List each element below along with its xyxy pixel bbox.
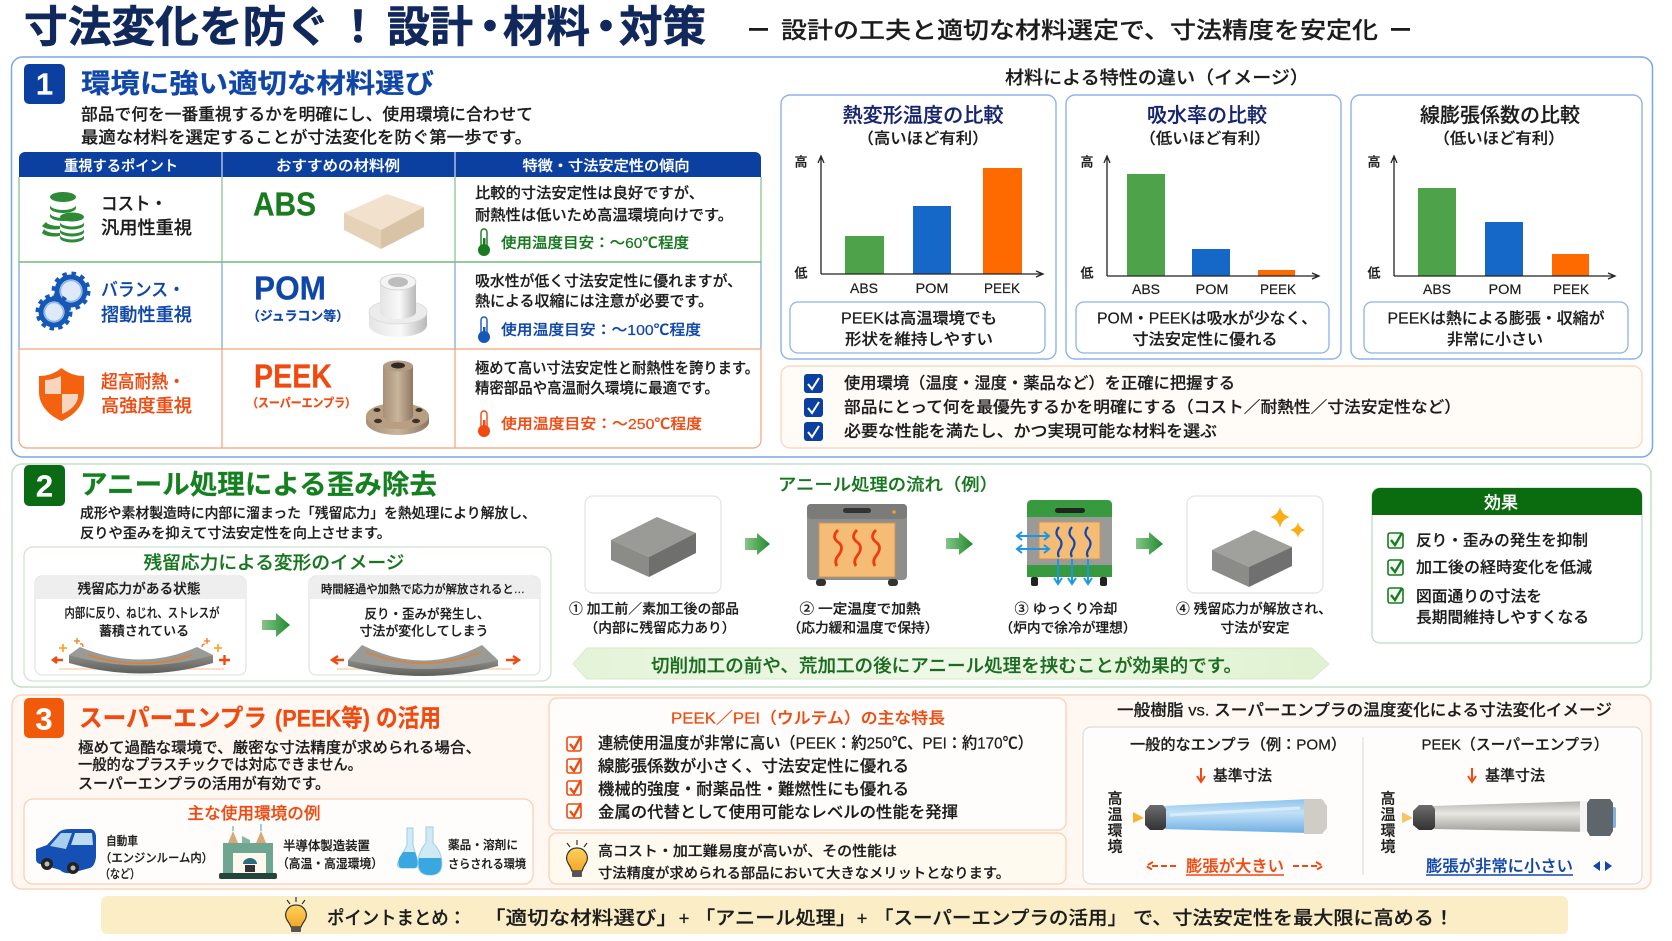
title — [24, 4, 706, 52]
icon: warped part — [332, 645, 519, 676]
heading 2: アニール処理による歪み除去 — [80, 470, 437, 500]
row label: heat resistance: 高強度重視 — [101, 396, 192, 416]
icon: gears — [38, 274, 88, 328]
expansion label: 膨張が非常に小さい — [1426, 856, 1573, 876]
bar chart: PEEK — [1553, 281, 1590, 297]
effects list: 長期間維持しやすくなる — [1416, 608, 1589, 626]
card: expansion comparison — [1083, 727, 1642, 884]
checklist text — [844, 374, 1461, 440]
table header labels: 重視するポイント — [64, 158, 178, 175]
heading 1: 環境に強い適切な材料選び — [81, 69, 434, 99]
badge 2 — [24, 465, 65, 506]
step 1 label: （内部に残留応力あり） — [584, 620, 736, 636]
checklist text: 部品にとって何を最優先するかを明確にする（コスト／耐熱性／寸法安定性など） — [844, 398, 1461, 416]
state: stress released: 寸法が変化してしまう — [360, 624, 488, 638]
material name PEEK: PEEK — [254, 358, 332, 394]
description ABS — [475, 184, 733, 224]
check icons — [567, 736, 581, 818]
row label: balance: バランス・ — [101, 280, 185, 300]
column: PEEK — [1380, 736, 1616, 876]
material name ABS: ABS — [253, 186, 316, 222]
chart card: water absorption — [1066, 95, 1341, 359]
column: PEEK: 温 — [1380, 806, 1396, 824]
chart title: 線膨張係数の比較 — [1420, 104, 1580, 127]
bar chart: 低 — [1367, 266, 1381, 280]
expansion label — [1146, 856, 1323, 876]
text: chemicals: 薬品・溶剤に — [448, 837, 518, 852]
bar chart: PEEK — [984, 280, 1021, 296]
intro text 2: 成形や素材製造時に内部に溜まった「残留応力」を熱処理により解放し、 — [80, 505, 536, 521]
card title: PEEK／PEI（ウルテム）の主な特長 — [671, 710, 945, 728]
column: general engineering plastic — [1107, 736, 1346, 876]
text: chemicals: さらされる環境 — [448, 857, 526, 871]
chart card: thermal expansion — [1351, 95, 1642, 359]
intro text 2: 反りや歪みを抑えて寸法安定性を向上させます。 — [80, 525, 391, 541]
arrow: step 2 to 3 — [946, 532, 973, 555]
effects list: 図面通りの寸法を — [1416, 588, 1542, 606]
chart caption — [790, 302, 1045, 353]
step 2 label: （応力緩和温度で保持） — [788, 620, 938, 636]
step 4 label — [1176, 600, 1332, 636]
checklist text: 必要な性能を満たし、かつ実現可能な材料を選ぶ — [844, 422, 1217, 440]
features list — [598, 734, 1033, 822]
heading 3: (PEEK等) — [275, 704, 370, 732]
state: stress released — [309, 576, 540, 676]
summary text: + — [857, 908, 867, 928]
effects list: 加工後の経時変化を低減 — [1416, 558, 1593, 576]
chart caption: 形状を維持しやすい — [845, 330, 993, 348]
text: semiconductor: （高温・高湿環境） — [277, 856, 383, 871]
title: 材料 — [503, 4, 590, 52]
chart caption: PEEKは熱による膨張・収縮が — [1388, 308, 1605, 328]
row: cost — [42, 184, 733, 256]
icon: light bulb — [567, 840, 587, 877]
summary text: ポイントまとめ： — [327, 908, 466, 928]
bar chart: ABS — [850, 280, 878, 296]
bar chart: 高 — [1080, 154, 1094, 170]
column: general engineering plastic: 温 — [1107, 806, 1123, 824]
chart section title: 材料による特性の違い（イメージ） — [1005, 68, 1309, 88]
column: PEEK: 基準寸法 — [1485, 768, 1545, 784]
bar chart — [794, 154, 1043, 296]
column: PEEK: 環 — [1380, 822, 1396, 840]
expansion label: 膨張が大きい — [1186, 856, 1284, 876]
state: residual stress present: 内部に反り、ねじれ、ストレスが — [64, 606, 220, 620]
state: stress released: 時間経過や加熱で応力が解放されると… — [321, 582, 525, 596]
title: 対策 — [619, 4, 706, 52]
icon: shield — [39, 368, 84, 421]
arrow: state transition — [262, 613, 290, 637]
heading 3: スーパーエンプラ — [79, 704, 267, 732]
expansion label — [1426, 856, 1612, 876]
column: PEEK: 高 — [1380, 790, 1396, 808]
row label: cost — [101, 194, 192, 238]
column: general engineering plastic: 境 — [1107, 838, 1123, 856]
chart caption: 寸法安定性に優れる — [1132, 330, 1278, 348]
summary bar — [101, 896, 1568, 934]
chart title: 熱変形温度の比較 — [842, 104, 1004, 127]
column: general engineering plastic: 高 — [1107, 790, 1123, 808]
step 4: stable part — [1176, 496, 1332, 636]
summary text: で、寸法安定性を最大限に高める！ — [1133, 908, 1454, 928]
intro text 1: 最適な材料を選定することが寸法変化を防ぐ第一歩です。 — [81, 127, 532, 147]
arrow: step 1 to 2 — [745, 533, 770, 555]
chart caption — [1076, 302, 1329, 353]
step 3 label — [1000, 600, 1136, 636]
text: semiconductor: 半導体製造装置 — [283, 838, 370, 853]
text: automotive: （エンジンルーム内） — [100, 850, 213, 865]
bar chart — [1367, 154, 1615, 297]
summary text: 「アニール処理」 — [695, 908, 856, 928]
step 2 label — [788, 602, 938, 636]
column: PEEK: PEEK（スーパーエンプラ） — [1422, 736, 1608, 754]
summary text: 「スーパーエンプラの活用」 — [874, 908, 1127, 928]
banner: timing advice: 切削加工の前や、荒加工の後にアニール処理を挟むことが効果的です。 — [651, 655, 1242, 676]
description ABS: 耐熱性は低いため高温環境向けです。 — [475, 207, 733, 224]
step 1 label — [569, 600, 739, 636]
PEEK note: （スーパーエンプラ） — [247, 396, 356, 410]
title: ！ — [336, 4, 380, 52]
card: use environments — [24, 799, 533, 884]
bar chart: PEEK — [1260, 281, 1297, 297]
card: cost tip — [549, 833, 1066, 884]
check icons — [1388, 533, 1403, 603]
chart caption — [1364, 302, 1628, 353]
tip text: 寸法精度が求められる部品において大きなメリットとなります。 — [598, 865, 1010, 881]
step 3 label: （炉内で徐冷が理想） — [1000, 620, 1136, 636]
step 4 label: ④ 残留応力が解放され、 — [1176, 600, 1332, 616]
badge 3: 3 — [35, 702, 53, 736]
icon: car — [36, 829, 96, 874]
bar chart: 高 — [794, 154, 808, 170]
row label: balance — [101, 280, 192, 325]
text: chemicals — [448, 837, 526, 871]
description POM: 吸水性が低く寸法安定性に優れますが、 — [475, 272, 742, 290]
comparison section title: 一般樹脂 vs. スーパーエンプラの温度変化による寸法変化イメージ — [1117, 702, 1612, 720]
column: general engineering plastic: 基準寸法 — [1213, 768, 1272, 784]
row label: cost: コスト・ — [101, 194, 167, 214]
chart subtitle: （低いほど有利） — [1434, 130, 1564, 148]
step 2 label: ② 一定温度で加熱 — [800, 602, 921, 616]
intro text 2 — [80, 505, 536, 541]
state: residual stress present: 蓄積されている — [99, 624, 189, 638]
table header labels — [64, 158, 690, 175]
icon: PEEK flange part — [366, 360, 429, 435]
features list: 線膨張係数が小さく、寸法安定性に優れる — [598, 756, 909, 776]
state: residual stress present: 残留応力がある状態 — [78, 580, 201, 596]
illustration: large expansion rod — [1133, 799, 1327, 834]
bar chart: 低 — [1080, 266, 1094, 280]
text: automotive: 自動車 — [106, 833, 138, 848]
column: general engineering plastic: 環 — [1107, 822, 1123, 840]
tip text: 高コスト・加工難易度が高いが、その性能は — [598, 843, 897, 859]
row: heat resistance — [39, 358, 759, 437]
icon: oven — [807, 504, 907, 586]
icon: flasks — [398, 827, 442, 875]
description PEEK: 極めて高い寸法安定性と耐熱性を誇ります。 — [475, 360, 759, 377]
state: residual stress present — [35, 576, 246, 675]
state: stress released: 反り・歪みが発生し、 — [364, 606, 490, 622]
step 1: raw part — [569, 496, 739, 636]
bar chart: POM — [1488, 281, 1522, 297]
text: automotive: （など） — [100, 867, 140, 881]
step 4 label: 寸法が安定 — [1220, 620, 1290, 636]
badge 2: 2 — [36, 468, 53, 504]
temperature POM: 使用温度目安：～100℃程度 — [501, 322, 701, 339]
features list: 機械的強度・耐薬品性・難燃性にも優れる — [598, 780, 909, 798]
icon: reference arrow — [1197, 768, 1205, 782]
bar chart: POM — [916, 280, 948, 296]
intro text 3: 一般的なプラスチックでは対応できません。 — [78, 756, 362, 774]
row label: heat resistance — [101, 372, 192, 416]
card: effects — [1372, 488, 1642, 643]
icon: semiconductor equipment — [219, 824, 277, 879]
summary text: + — [679, 908, 689, 928]
bar chart: 高 — [1367, 154, 1381, 170]
icon: reference arrow — [1468, 768, 1476, 782]
features list: 連続使用温度が非常に高い（PEEK：約250℃、PEI：約170℃） — [598, 734, 1033, 752]
bar chart: 低 — [794, 266, 808, 280]
summary text — [327, 908, 1454, 928]
badge 1: 1 — [36, 66, 53, 102]
icon: light bulb — [286, 897, 306, 932]
panel: section 2 annealing — [12, 464, 1651, 687]
description PEEK: 精密部品や高温耐久環境に最適です。 — [475, 379, 719, 397]
intro text 1: 部品で何を一番重視するかを明確にし、使用環境に合わせて — [81, 105, 533, 124]
column: PEEK: 境 — [1380, 838, 1396, 856]
chart title: 吸水率の比較 — [1147, 104, 1267, 127]
row: balance — [38, 270, 742, 343]
checklist: material selection — [781, 366, 1642, 448]
heading 3 — [79, 704, 441, 732]
intro text 1 — [81, 105, 533, 147]
step 3: slow cooling — [1000, 500, 1136, 636]
icon: gray block with sparkles — [1212, 507, 1305, 587]
badge 3 — [24, 698, 64, 738]
bar chart — [1080, 154, 1319, 297]
chart card: heat deflection temperature — [781, 95, 1056, 359]
tip text — [598, 843, 1010, 881]
title: 寸法変化を防ぐ — [24, 4, 330, 52]
chart caption: 非常に小さい — [1447, 330, 1543, 348]
effects list: 反り・歪みの発生を抑制 — [1416, 532, 1588, 550]
icon: thermometer blue — [478, 317, 490, 343]
icon: coins — [42, 192, 84, 242]
chart subtitle: （低いほど有利） — [1140, 130, 1270, 148]
effects heading: 効果 — [1484, 494, 1518, 512]
bar chart: ABS — [1423, 281, 1451, 297]
table header labels: 特徴・寸法安定性の傾向 — [522, 158, 690, 175]
subtitle: 設計の工夫と適切な材料選定で、寸法精度を安定化 — [781, 17, 1378, 43]
row label: cost: 汎用性重視 — [101, 218, 192, 238]
banner: timing advice — [573, 648, 1329, 679]
flow heading: アニール処理の流れ（例） — [778, 476, 998, 494]
text: automotive — [100, 833, 213, 881]
features list: 金属の代替として使用可能なレベルの性能を発揮 — [598, 804, 958, 822]
row label: heat resistance: 超高耐熱・ — [101, 372, 185, 392]
chart caption: POM・PEEKは吸水が少なく、 — [1097, 308, 1317, 328]
icon: thermometer green — [478, 229, 490, 256]
chart caption: PEEKは高温環境でも — [841, 310, 997, 328]
intro text 3: 極めて過酷な環境で、厳密な寸法精度が求められる場合、 — [78, 738, 481, 756]
card: residual stress deformation — [24, 547, 551, 681]
material table — [19, 152, 761, 448]
POM note: （ジュラコン等） — [247, 308, 349, 324]
temperature PEEK: 使用温度目安：～250℃程度 — [501, 416, 702, 433]
chart subtitle: （高いほど有利） — [858, 130, 988, 148]
step 2: heating oven — [788, 504, 938, 636]
title: ・ — [468, 4, 512, 52]
icon: curved part under stress — [53, 638, 230, 674]
card title: 主な使用環境の例 — [188, 804, 320, 823]
column: general engineering plastic: 一般的なエンプラ（例：POM） — [1130, 736, 1346, 754]
arrow: step 3 to 4 — [1136, 532, 1163, 555]
description POM — [475, 272, 742, 310]
intro text 3: スーパーエンプラの活用が有効です。 — [78, 774, 330, 792]
description ABS: 比較的寸法安定性は良好ですが、 — [475, 184, 704, 202]
badge 1 — [24, 64, 65, 104]
title: 設計 — [387, 4, 473, 52]
summary text: 「適切な材料選び」 — [484, 908, 678, 928]
bar chart: ABS — [1132, 281, 1160, 297]
icon: gray block — [611, 517, 696, 577]
check icons — [804, 374, 823, 441]
panel: section 3 super engineering plastics — [12, 695, 1651, 889]
heading 3: の活用 — [376, 704, 441, 732]
description POM: 熱による収縮には注意が必要です。 — [475, 292, 713, 310]
card title: 残留応力による変形のイメージ — [144, 552, 404, 573]
effects list — [1416, 532, 1593, 626]
temperature ABS: 使用温度目安：～60℃程度 — [501, 235, 689, 252]
icon: POM bushing — [369, 274, 427, 337]
card: PEEK/PEI features — [549, 698, 1066, 830]
description PEEK — [475, 360, 759, 397]
material name POM: POM — [254, 270, 326, 306]
text: semiconductor — [277, 838, 383, 871]
checklist text: 使用環境（温度・湿度・薬品など）を正確に把握する — [844, 374, 1235, 392]
title: ・ — [584, 4, 628, 52]
icon: cooling furnace — [1017, 500, 1112, 586]
table header labels: おすすめの材料例 — [276, 158, 400, 175]
step 1 label: ① 加工前／素加工後の部品 — [569, 600, 739, 616]
illustration: small expansion rod — [1402, 799, 1616, 836]
bar chart: POM — [1196, 281, 1228, 297]
icon: thermometer orange — [478, 411, 490, 437]
intro text 3 — [78, 738, 481, 792]
step 3 label: ③ ゆっくり冷却 — [1014, 600, 1118, 616]
row label: balance: 摺動性重視 — [101, 305, 192, 325]
icon: ABS block — [344, 194, 424, 249]
